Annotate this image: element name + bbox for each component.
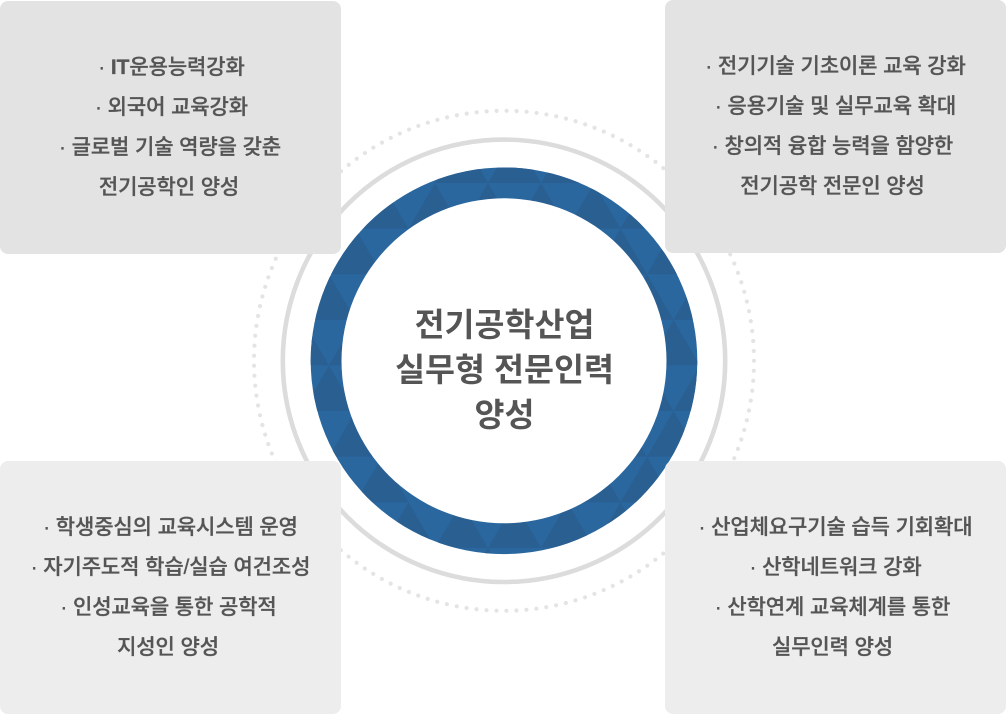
text line: 지성인 양성 (117, 636, 219, 659)
panel: top left (0, 1, 341, 254)
text line: · 자기주도적 학습/실습 여건조성 (31, 556, 310, 579)
text line: 실무인력 양성 (772, 636, 893, 659)
dotted outer ring (254, 111, 754, 611)
blue triangle-patterned ring (310, 168, 698, 554)
white inner circle (342, 198, 666, 523)
gray solid ring (283, 140, 725, 582)
center title: 전기공학산업 (415, 306, 594, 342)
concentric ring graphic (252, 108, 756, 613)
text line: · 학생중심의 교육시스템 운영 (43, 516, 298, 539)
text line: · 산학네트워크 강화 (749, 556, 922, 579)
text line: 전기공학 전문인 양성 (740, 175, 925, 198)
panel: bottom left (0, 461, 341, 714)
text line: · 글로벌 기술 역량을 갖춘 (59, 136, 281, 159)
text line: · IT운용능력강화 (98, 56, 245, 79)
center title: 양성 (475, 396, 534, 433)
text line: · 산학연계 교육체계를 통한 (715, 596, 950, 619)
center title (395, 306, 614, 433)
center title: 실무형 전문인력 (395, 351, 614, 388)
text line: · 창의적 융합 능력을 함양한 (712, 135, 953, 158)
panel: bottom right (665, 461, 1006, 714)
panel: top right (665, 0, 1006, 253)
text line: · 외국어 교육강화 (95, 96, 248, 119)
text line: · 산업체요구기술 습득 기회확대 (699, 516, 972, 539)
text line: 전기공학인 양성 (99, 176, 239, 199)
text line: · 응용기술 및 실무교육 확대 (715, 95, 956, 118)
text line: · 전기기술 기초이론 교육 강화 (705, 55, 966, 78)
text line: · 인성교육을 통한 공학적 (60, 596, 277, 619)
